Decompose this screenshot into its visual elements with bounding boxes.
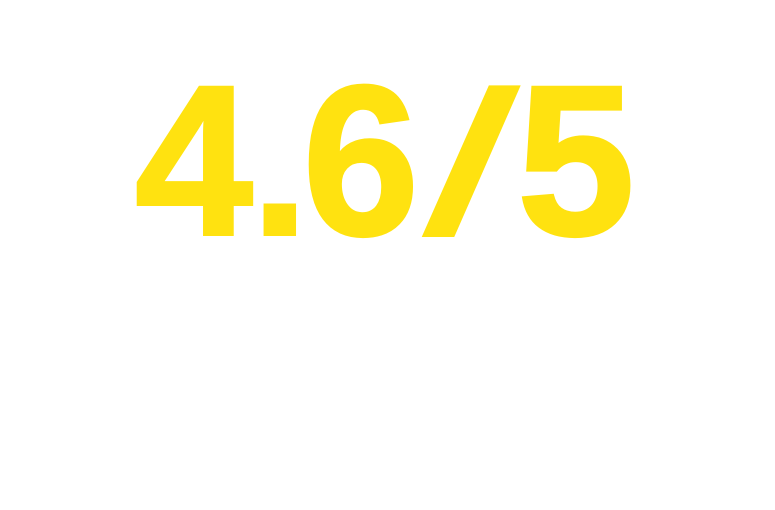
rating figure: 4.6/5: 6 [302, 41, 419, 280]
rating figure: 4.6/5 [135, 41, 635, 281]
rating figure: 4.6/5: 4 [135, 42, 253, 281]
rating figure: 4.6/5: 5 [517, 42, 635, 281]
rating figure: 4.6/5: . [250, 50, 310, 279]
rating figure: 4.6/5: / [426, 52, 518, 276]
